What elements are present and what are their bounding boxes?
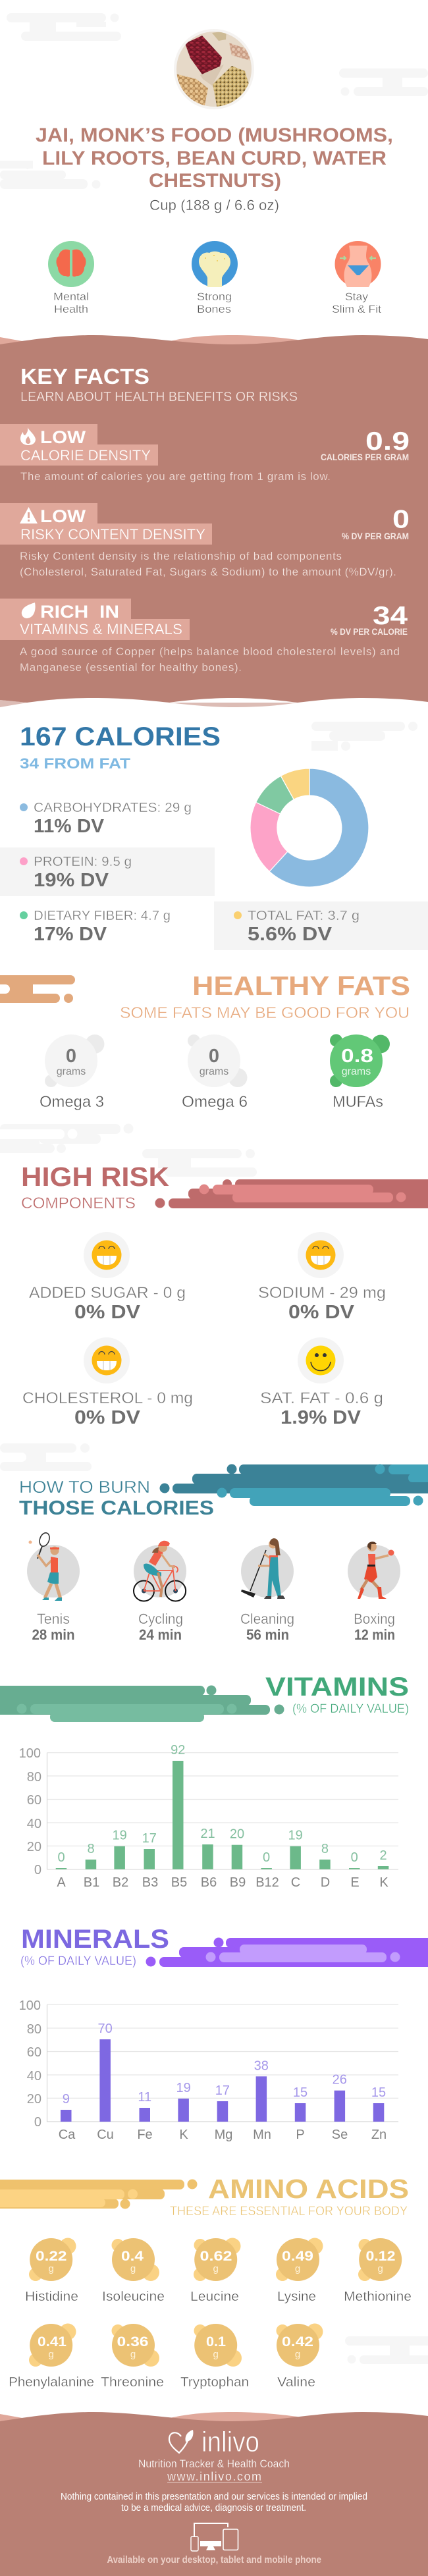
bar chart: minerals: K <box>179 2128 188 2142</box>
background cloud: burn <box>0 1443 92 1471</box>
decorative band <box>159 1464 428 1506</box>
bar chart: vitamins: 8 <box>321 1842 329 1856</box>
disclaimer: to be a medical advice, diagnosis or treatment. <box>121 2502 306 2513</box>
fact: rich in vitamins and minerals: A good source of Copper (helps balance blood cholesterol levels) and <box>20 645 400 658</box>
risk: saturated fat <box>260 1337 383 1428</box>
panel: amino acids <box>0 2174 412 2390</box>
fact: calorie density <box>0 424 410 483</box>
subheading: THESE ARE ESSENTIAL FOR YOUR BODY <box>170 2205 408 2218</box>
amino: valine: 0.42 <box>282 2334 313 2349</box>
bar chart: vitamins: 92 <box>171 1743 185 1758</box>
activity: cycling: Cycling <box>138 1611 183 1627</box>
subheading: COMPONENTS <box>21 1194 136 1212</box>
amino: lysine: 0.49 <box>282 2249 313 2264</box>
heading: high risk: HIGH RISK <box>21 1162 169 1192</box>
food photo <box>174 29 254 109</box>
panel: key facts <box>0 335 428 707</box>
title: CHESTNUTS) <box>149 170 281 192</box>
bar chart: vitamins: E <box>350 1875 360 1890</box>
fact: calorie density: CALORIES PER GRAM <box>321 452 409 462</box>
background cloud: amino <box>345 2336 428 2364</box>
bar chart: vitamins: 0 <box>351 1850 358 1865</box>
serving size: Cup (188 g / 6.6 oz) <box>149 197 279 213</box>
amino: histidine: 0.22 <box>36 2249 67 2264</box>
bar chart: vitamins: D <box>321 1875 330 1890</box>
bar chart: vitamins: 21 <box>200 1827 215 1841</box>
background cloud: calories <box>311 722 417 751</box>
bar chart: vitamins: B2 <box>113 1875 128 1890</box>
nutrient: protein <box>20 855 132 891</box>
nutrient: dietary fiber: 17% DV <box>34 924 107 945</box>
amino: methionine: 0.12 <box>366 2249 395 2264</box>
amino: isoleucine: g <box>130 2263 136 2274</box>
amino: methionine: g <box>378 2263 383 2274</box>
decorative band <box>155 1179 428 1208</box>
bar chart: vitamins: A <box>57 1875 66 1890</box>
fact: risky content density: 0 <box>392 506 410 533</box>
benefit: mental health: Health <box>54 303 88 315</box>
subheading: SOME FATS MAY BE GOOD FOR YOU <box>120 1004 410 1022</box>
stat: omega 6: 0 <box>209 1046 219 1067</box>
title: LILY ROOTS, BEAN CURD, WATER <box>42 148 387 169</box>
risk: cholesterol <box>22 1337 193 1428</box>
nutrient: dietary fiber: DIETARY FIBER: 4.7 g <box>34 909 171 923</box>
heading: key facts: KEY FACTS <box>20 364 149 389</box>
amino: lysine: g <box>295 2263 300 2274</box>
fact: rich in vitamins and minerals: % DV PER CALORIE <box>331 627 408 637</box>
bar chart: vitamins: B12 <box>255 1875 279 1890</box>
bar chart: minerals: 70 <box>97 2022 113 2036</box>
background clouds: top <box>0 13 428 189</box>
bar chart: minerals: 20 <box>27 2092 41 2106</box>
benefit: mental health <box>48 241 94 315</box>
amino: isoleucine: 0.4 <box>121 2249 144 2264</box>
activity: boxing: Boxing <box>354 1611 395 1627</box>
panel: calories <box>0 722 428 950</box>
logo: inlivo <box>169 2426 259 2458</box>
bar chart: minerals: 80 <box>27 2022 41 2037</box>
risk: sodium: 0% DV <box>288 1302 355 1323</box>
subheading: (% OF DAILY VALUE) <box>20 1954 136 1968</box>
fact: risky content density: LOW <box>40 506 86 526</box>
risk: cholesterol: CHOLESTEROL - 0 mg <box>22 1389 193 1407</box>
nutrient: total fat <box>234 909 360 945</box>
activity: cleaning <box>240 1538 294 1643</box>
amino: isoleucine <box>102 2238 165 2304</box>
bar chart: minerals: 9 <box>63 2092 70 2106</box>
panel: footer <box>0 2412 428 2576</box>
fact: calorie density: The amount of calories you are getting from 1 gram is low. <box>20 470 331 483</box>
bar chart: minerals: 38 <box>254 2058 269 2073</box>
amino: leucine: Leucine <box>190 2290 239 2304</box>
stat: omega 6: Omega 6 <box>182 1093 248 1111</box>
nutrient: total fat: 5.6% DV <box>248 924 333 945</box>
amino: threonine: Threonine <box>101 2375 164 2390</box>
risk: added sugar: 0% DV <box>74 1302 141 1323</box>
bar chart: minerals: Mg <box>215 2128 232 2142</box>
fact: calorie density: LOW <box>40 427 86 447</box>
panel: high risk <box>21 1162 428 1428</box>
amino: lysine <box>276 2238 323 2304</box>
amino: tryptophan: 0.1 <box>206 2334 226 2349</box>
activity: cycling <box>134 1541 186 1643</box>
bar chart: minerals: 40 <box>27 2069 41 2083</box>
activity: cleaning: Cleaning <box>240 1611 294 1627</box>
activity: cleaning: 56 min <box>246 1626 289 1643</box>
bar chart: minerals: P <box>296 2128 305 2142</box>
bar chart: vitamins: 40 <box>27 1817 41 1831</box>
fact: calorie density: CALORIE DENSITY <box>20 447 151 464</box>
amino: histidine: Histidine <box>25 2290 78 2304</box>
fact: rich in vitamins and minerals <box>0 599 408 674</box>
subheading: LEARN ABOUT HEALTH BENEFITS OR RISKS <box>20 390 298 404</box>
risk: sodium: SODIUM - 29 mg <box>258 1284 386 1302</box>
fact: rich in vitamins and minerals: Manganese (essential for healthy bones). <box>20 661 242 674</box>
benefit: strong bones <box>192 241 238 315</box>
activity: tennis <box>27 1532 80 1643</box>
amino: histidine <box>25 2238 78 2304</box>
bar chart: minerals <box>19 1999 398 2142</box>
amino: lysine: Lysine <box>277 2290 316 2304</box>
nutrient: dietary fiber <box>20 909 171 945</box>
decorative band <box>0 2180 198 2209</box>
amino: methionine: Methionine <box>344 2290 412 2304</box>
amino: phenylalanine: 0.41 <box>38 2334 67 2349</box>
bar chart: vitamins: 0 <box>263 1850 270 1865</box>
background clouds: high risk <box>0 1123 257 1177</box>
activity: tennis: 28 min <box>32 1626 75 1643</box>
stat: omega 3: grams <box>57 1066 86 1077</box>
stat: mufas: MUFAs <box>333 1093 383 1111</box>
heading: how to burn: HOW TO BURN <box>19 1477 150 1497</box>
panel: healthy fats <box>0 971 410 1111</box>
donut chart <box>250 768 369 887</box>
nutrient: carbohydrates: CARBOHYDRATES: 29 g <box>34 801 192 815</box>
benefit: stay slim and fit <box>332 241 381 315</box>
heading: vitamins: VITAMINS <box>265 1673 409 1702</box>
bar chart: vitamins: 20 <box>27 1840 41 1854</box>
bar chart: vitamins: C <box>291 1875 300 1890</box>
risk: saturated fat: 1.9% DV <box>281 1407 361 1428</box>
stat: omega 3 <box>40 1034 104 1111</box>
amino: leucine: 0.62 <box>200 2249 232 2264</box>
subheading: from fat: 34 FROM FAT <box>20 755 131 772</box>
amino: leucine: g <box>213 2263 219 2274</box>
bar chart: minerals: 11 <box>138 2090 151 2105</box>
amino: phenylalanine: g <box>49 2349 54 2360</box>
amino: isoleucine: Isoleucine <box>102 2290 165 2304</box>
bar chart: minerals: 15 <box>371 2085 386 2100</box>
bar chart: minerals: Zn <box>371 2128 387 2142</box>
bar chart: vitamins <box>19 1743 398 1890</box>
fact: risky content density <box>0 503 410 578</box>
bar chart: vitamins: B5 <box>171 1875 187 1890</box>
bar chart: vitamins: 80 <box>27 1770 41 1784</box>
activity: boxing <box>348 1542 400 1643</box>
bar chart: vitamins: 60 <box>27 1793 41 1808</box>
activity: cycling: 24 min <box>139 1626 182 1643</box>
amino: tryptophan: Tryptophan <box>180 2375 249 2390</box>
nutrient: carbohydrates: 11% DV <box>34 816 105 837</box>
nutrient: protein: 19% DV <box>34 870 109 891</box>
amino: threonine: g <box>130 2349 136 2360</box>
benefit: strong bones: Strong <box>197 290 232 303</box>
bar chart: minerals: 26 <box>333 2073 347 2087</box>
bar chart: vitamins: K <box>379 1875 388 1890</box>
heading: amino acids: AMINO ACIDS <box>208 2174 409 2204</box>
logo: inlivo: inlivo <box>201 2426 259 2458</box>
fact: rich in vitamins and minerals: VITAMINS & MINERALS <box>20 621 182 637</box>
stat: mufas: 0.8 <box>341 1046 373 1067</box>
stat: omega 6 <box>182 1034 248 1111</box>
benefit: mental health: Mental <box>53 290 89 303</box>
amino: methionine <box>344 2238 412 2304</box>
bar chart: vitamins: 0 <box>34 1863 41 1877</box>
risk: cholesterol: 0% DV <box>74 1407 141 1428</box>
bar chart: minerals: Se <box>332 2128 348 2142</box>
amino: valine <box>277 2323 323 2390</box>
bar chart: vitamins: B6 <box>201 1875 217 1890</box>
heading: healthy fats: HEALTHY FATS <box>192 971 410 1001</box>
bar chart: minerals: Ca <box>59 2128 76 2142</box>
bar chart: vitamins: B1 <box>84 1875 99 1890</box>
icon: devices <box>191 2523 238 2551</box>
heading: those calories: THOSE CALORIES <box>19 1496 214 1519</box>
activity: tennis: Tenis <box>37 1611 70 1627</box>
bar chart: minerals: 60 <box>27 2045 41 2060</box>
bar chart: vitamins: 19 <box>288 1829 303 1843</box>
amino: phenylalanine: Phenylalanine <box>9 2375 94 2390</box>
availability note: Available on your desktop, tablet and mobile phone <box>107 2555 321 2565</box>
fact: rich in vitamins and minerals: RICH IN <box>40 602 119 622</box>
bar chart: minerals: 0 <box>34 2115 41 2130</box>
bar chart: minerals: Mn <box>253 2128 271 2142</box>
amino: phenylalanine <box>9 2323 94 2390</box>
fact: calorie density: 0.9 <box>365 427 410 456</box>
decorative band <box>146 1937 428 1967</box>
risk: saturated fat: SAT. FAT - 0.6 g <box>260 1389 383 1407</box>
nutrient: total fat: TOTAL FAT: 3.7 g <box>248 909 360 923</box>
disclaimer <box>61 2491 367 2513</box>
fact: risky content density: RISKY CONTENT DENSITY <box>20 526 205 543</box>
fact: risky content density: % DV PER GRAM <box>342 531 409 541</box>
heading: minerals: MINERALS <box>21 1925 169 1954</box>
fact: rich in vitamins and minerals: 34 <box>373 602 408 630</box>
bar chart: vitamins: 100 <box>19 1746 41 1761</box>
activity: boxing: 12 min <box>354 1626 395 1643</box>
disclaimer: Nothing contained in this presentation and our services is intended or implied <box>61 2491 367 2502</box>
risk: added sugar <box>29 1232 186 1323</box>
bar chart: vitamins: 17 <box>142 1831 157 1846</box>
bar chart: minerals: Fe <box>137 2128 153 2142</box>
stat: omega 3: Omega 3 <box>40 1093 104 1111</box>
risk: sodium <box>258 1232 386 1323</box>
bar chart: minerals: 19 <box>176 2081 191 2095</box>
decorative band <box>0 1686 284 1722</box>
stat: omega 3: 0 <box>66 1046 76 1067</box>
nutrient: carbohydrates <box>20 801 192 837</box>
bar chart: minerals: 17 <box>215 2083 230 2098</box>
panel: vitamins <box>0 1673 409 1890</box>
risk: added sugar: ADDED SUGAR - 0 g <box>29 1284 186 1302</box>
amino: valine: Valine <box>277 2375 315 2390</box>
amino: threonine <box>101 2324 164 2390</box>
bar chart: minerals: 100 <box>19 1999 41 2013</box>
tagline: Nutrition Tracker & Health Coach <box>138 2457 290 2470</box>
stat: mufas <box>330 1034 390 1111</box>
amino: tryptophan <box>180 2324 249 2390</box>
fact: risky content density: Risky Content density is the relationship of bad components <box>20 550 342 562</box>
benefit: strong bones: Bones <box>197 303 231 315</box>
stat: mufas: grams <box>342 1066 371 1077</box>
panel: how to burn those calories <box>19 1464 428 1643</box>
stat: omega 6: grams <box>200 1066 228 1077</box>
title: JAI, MONK’S FOOD (MUSHROOMS, <box>36 124 393 146</box>
amino: tryptophan: g <box>213 2349 219 2360</box>
bar chart: vitamins: 19 <box>112 1829 127 1843</box>
title <box>36 124 393 192</box>
bar chart: vitamins: B9 <box>230 1875 246 1890</box>
benefit: stay slim and fit: Stay <box>345 290 368 303</box>
heading: calories: 167 CALORIES <box>20 722 221 751</box>
fact: risky content density: (Cholesterol, Saturated Fat, Sugars & Sodium) to the amount (%DV/gr). <box>20 566 396 578</box>
amino: histidine: g <box>49 2263 54 2274</box>
bar chart: vitamins: 2 <box>379 1848 387 1863</box>
subheading: (% OF DAILY VALUE) <box>292 1702 409 1716</box>
bar chart: vitamins: 8 <box>87 1842 95 1856</box>
nutrient: protein: PROTEIN: 9.5 g <box>34 855 132 869</box>
amino: threonine: 0.36 <box>117 2334 149 2349</box>
benefit: stay slim and fit: Slim & Fit <box>332 303 381 315</box>
bar chart: vitamins: B3 <box>142 1875 158 1890</box>
bar chart: vitamins: 0 <box>57 1850 65 1865</box>
bar chart: minerals: 15 <box>293 2085 308 2100</box>
bar chart: vitamins: 20 <box>230 1827 244 1842</box>
amino: valine: g <box>295 2349 300 2360</box>
website link: www.inlivo.com <box>167 2470 261 2483</box>
bar chart: minerals: Cu <box>97 2128 114 2142</box>
amino: leucine <box>190 2238 241 2304</box>
decorative band <box>0 975 75 1003</box>
panel: minerals <box>19 1925 428 2142</box>
